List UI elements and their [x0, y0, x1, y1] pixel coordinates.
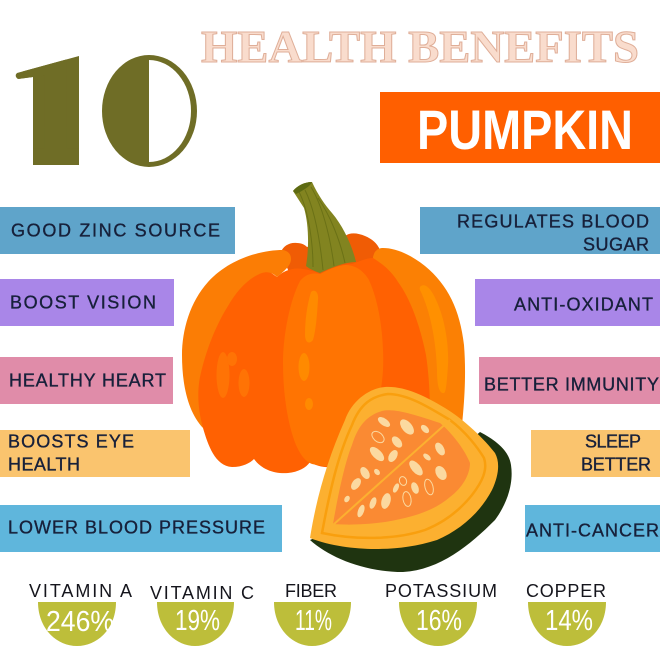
pumpkin dark base	[190, 258, 445, 473]
benefit: sleep better	[531, 430, 660, 477]
nutrient: fiber: FIBER	[285, 581, 337, 601]
benefit: lower blood pressure	[0, 505, 282, 552]
nutrient: copper	[526, 581, 606, 646]
benefit: boost vision	[0, 279, 174, 326]
pumpkin stem	[293, 182, 356, 273]
pumpkin illustration	[182, 182, 465, 473]
nutrient: potassium: 16%	[416, 605, 462, 637]
benefit: sleep better: BETTER	[581, 454, 651, 474]
benefit: better immunity	[479, 357, 660, 404]
pumpkin slice	[310, 387, 512, 572]
benefit: good zinc source	[0, 207, 235, 254]
pumpkin right light lobe	[373, 248, 465, 425]
slice seeds	[343, 415, 449, 518]
benefit: better immunity: BETTER IMMUNITY	[484, 374, 659, 394]
nutrient: vitamin a: VITAMIN A	[29, 581, 132, 601]
benefit: boosts eye health	[0, 430, 190, 477]
benefit: boost vision: BOOST VISION	[10, 292, 156, 312]
slice flesh	[310, 387, 498, 549]
nutrient: vitamin a	[29, 581, 132, 646]
benefit: regulates blood sugar: SUGAR	[583, 234, 649, 254]
pumpkin highlights	[305, 291, 318, 342]
slice core	[333, 410, 470, 525]
benefit: anti-oxidant	[475, 279, 660, 326]
benefit: healthy heart	[0, 357, 173, 404]
benefit: anti-cancer: ANTI-CANCER	[526, 520, 659, 540]
nutrient: potassium: POTASSIUM	[385, 581, 497, 601]
benefit: anti-oxidant: ANTI-OXIDANT	[514, 294, 653, 314]
nutrient: vitamin c: 19%	[175, 605, 220, 637]
title number 10	[16, 55, 197, 167]
nutrient: fiber	[274, 581, 351, 646]
pumpkin center lobe	[283, 265, 383, 466]
nutrient: vitamin c: VITAMIN C	[150, 583, 254, 603]
slice rind	[310, 432, 512, 572]
benefit: regulates blood sugar	[420, 207, 660, 254]
benefit: boosts eye health: BOOSTS EYE	[8, 432, 134, 452]
pumpkin left light lobe	[182, 250, 291, 428]
nutrient: fiber: 11%	[295, 605, 332, 637]
nutrient: vitamin a: 246%	[46, 606, 114, 638]
benefit: sleep better: SLEEP	[585, 432, 641, 452]
pumpkin crown	[281, 233, 380, 285]
benefit: boosts eye health: HEALTH	[8, 454, 80, 474]
nutrient: vitamin c	[150, 583, 254, 646]
heading: health benefits: HEALTH BENEFITS	[201, 21, 639, 72]
benefit: lower blood pressure: LOWER BLOOD PRESSURE	[8, 518, 265, 538]
nutrient: copper: 14%	[545, 605, 593, 637]
title number 10: 1	[8, 23, 96, 199]
benefit: healthy heart: HEALTHY HEART	[9, 370, 166, 390]
benefit: good zinc source: GOOD ZINC SOURCE	[11, 220, 220, 240]
nutrient: copper: COPPER	[526, 581, 606, 601]
benefit: anti-cancer	[525, 505, 660, 552]
nutrient: potassium	[385, 581, 497, 646]
title number 10: 0	[102, 22, 204, 200]
benefit: regulates blood sugar: REGULATES BLOOD	[457, 212, 649, 232]
